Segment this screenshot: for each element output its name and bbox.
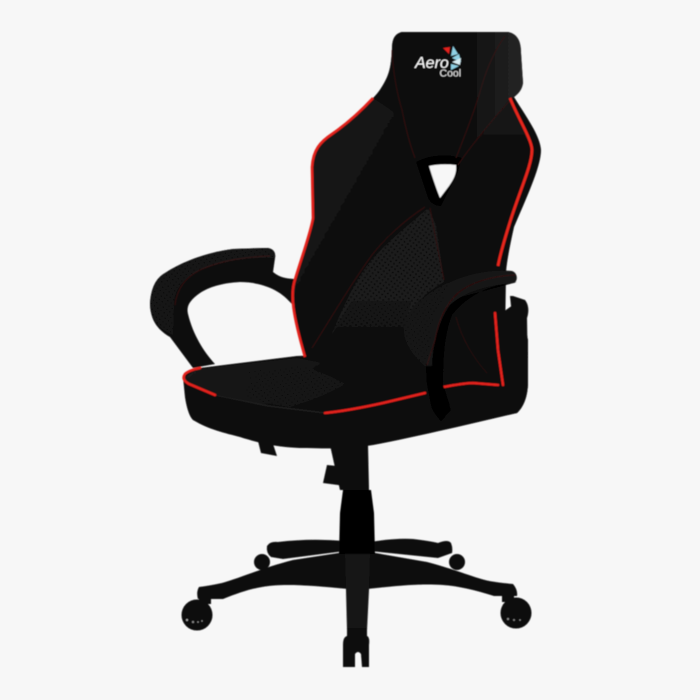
centre mesh panel — [330, 208, 444, 358]
left back panel — [293, 98, 440, 357]
lumbar triangular hole — [429, 164, 456, 198]
headrest — [375, 32, 523, 166]
mesh shadow — [330, 300, 412, 358]
arm stitching — [175, 256, 270, 305]
rear left leg — [267, 540, 345, 559]
front left leg — [197, 550, 358, 599]
right armrest — [404, 271, 528, 425]
chair — [150, 32, 541, 667]
left armrest — [150, 248, 298, 368]
arm pad — [150, 248, 275, 335]
right red piping — [498, 98, 532, 266]
rear casters — [254, 554, 270, 570]
star base with casters — [182, 539, 532, 667]
tilt knob — [258, 441, 277, 456]
arm pad — [404, 271, 517, 366]
seat stitching — [215, 395, 325, 413]
rear right leg — [370, 539, 452, 558]
gas lift column — [258, 441, 375, 554]
seat top surface — [184, 358, 440, 413]
lever housing — [323, 465, 357, 487]
front centre leg — [345, 553, 370, 630]
front right leg — [358, 550, 517, 596]
lumbar hole surround — [416, 155, 462, 206]
logo — [414, 46, 461, 80]
seat mesh — [245, 366, 345, 407]
left caster — [182, 596, 212, 630]
logo wordmark: Aero — [414, 55, 449, 72]
seat red piping — [184, 313, 503, 413]
seat cushion — [183, 300, 528, 448]
backrest — [293, 32, 541, 385]
logo mark — [443, 46, 461, 70]
back stitching — [312, 36, 513, 348]
arm bracket and side frame — [445, 296, 528, 425]
front caster — [343, 628, 369, 667]
frame inner stitching — [456, 317, 487, 373]
left red piping — [293, 98, 373, 357]
arm stitching — [427, 275, 515, 365]
backrest shell — [293, 32, 541, 385]
arm support — [426, 282, 517, 421]
right caster — [500, 594, 532, 628]
right back panel — [430, 98, 532, 293]
logo: Cool — [440, 68, 461, 80]
